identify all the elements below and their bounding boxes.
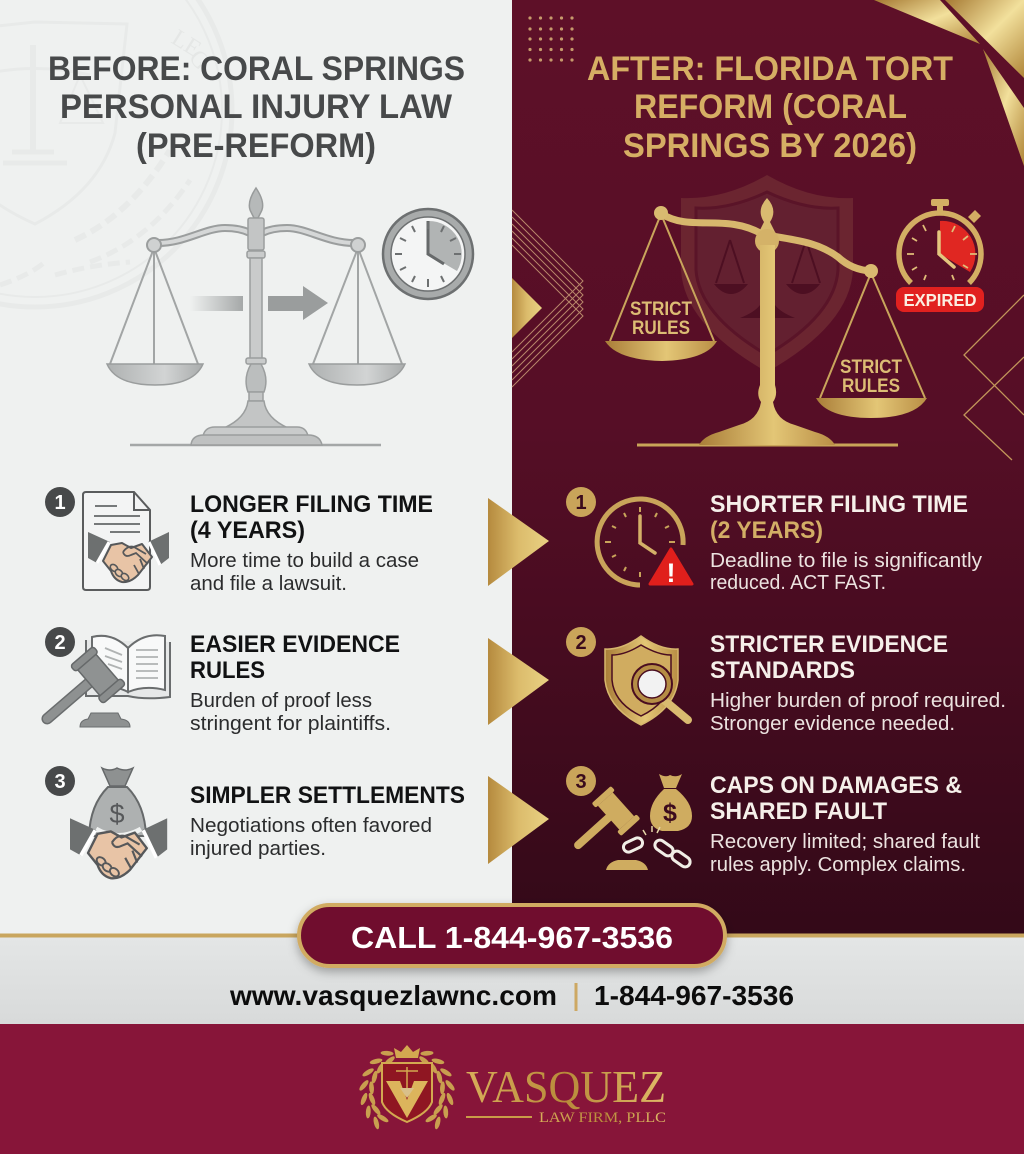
item 2 before: EASIER EVIDENCE <box>190 631 400 658</box>
title: before: PERSONAL INJURY LAW <box>60 88 453 126</box>
item 3 after: SHARED FAULT <box>710 798 887 825</box>
top right gold ribbon <box>874 0 1024 166</box>
icon: gavel bag broken chain <box>560 774 692 870</box>
contact band <box>0 936 1024 1024</box>
item 2 after: Stronger evidence needed. <box>710 713 955 735</box>
logo wordmark: VASQUEZ <box>466 1061 666 1112</box>
title: after: SPRINGS BY 2026) <box>623 127 917 165</box>
text: strict rules right: STRICT <box>840 357 902 378</box>
text: strict rules right <box>840 357 902 397</box>
icon: shield magnifier <box>605 636 688 725</box>
icon: money bag handshake: $ <box>109 799 125 829</box>
item 1 before: LONGER FILING TIME <box>190 491 433 518</box>
item 2 before: RULES <box>190 657 265 684</box>
panel: after background <box>512 0 1024 936</box>
text: strict rules left: RULES <box>632 318 690 339</box>
badge: expired <box>896 287 984 312</box>
item 3 after: CAPS ON DAMAGES & <box>710 772 962 799</box>
title: before: BEFORE: CORAL SPRINGS <box>48 50 465 88</box>
panel: before background <box>0 0 512 936</box>
icon: stopwatch expired <box>896 199 984 312</box>
item 2 before: Burden of proof less <box>190 690 372 712</box>
item 2 before: stringent for plaintiffs. <box>190 713 391 735</box>
icon: grey clock <box>383 209 473 299</box>
item 1 before: (4 YEARS) <box>190 517 305 544</box>
icon: clock warning <box>597 499 692 588</box>
call button: CALL 1-844-967-3536 <box>351 920 673 955</box>
item 3 after <box>560 766 980 876</box>
watermark seal: G <box>183 45 214 75</box>
item 2 after: 2 <box>575 632 587 654</box>
logo wordmark: LAW FIRM, PLLC <box>539 1110 666 1126</box>
item 1 before <box>45 487 433 595</box>
title: before <box>48 50 465 165</box>
call button <box>299 905 725 966</box>
item 1 after: reduced. ACT FAST. <box>710 572 886 594</box>
logo emblem <box>357 1045 457 1131</box>
arrow: grey <box>190 286 328 320</box>
icon: money bag handshake <box>70 768 167 878</box>
title: after: REFORM (CORAL <box>634 88 907 126</box>
icon: document handshake <box>83 492 169 590</box>
item 3 after: rules apply. Complex claims. <box>710 854 966 876</box>
gold side chevron <box>512 278 542 338</box>
watermark seal: LE <box>167 25 205 63</box>
icon: book and gavel <box>27 635 170 741</box>
item 2 before: 2 <box>54 632 66 654</box>
watermark shield <box>681 175 853 372</box>
item 1 after: (2 YEARS) <box>710 517 823 544</box>
watermark seal <box>0 0 232 307</box>
item 2 after: STANDARDS <box>710 657 855 684</box>
contact line <box>229 980 794 1011</box>
item 2 after <box>566 627 1006 735</box>
item 3 before: injured parties. <box>190 838 326 860</box>
footer band <box>0 1024 1024 1154</box>
arrow 1 <box>488 498 549 586</box>
text: strict rules left: STRICT <box>630 299 692 320</box>
tilted gold scales <box>605 198 927 445</box>
arrow 3 <box>488 776 549 864</box>
item 3 before: 3 <box>54 771 66 793</box>
item 3 after: 3 <box>575 771 587 793</box>
title: after: AFTER: FLORIDA TORT <box>587 50 953 88</box>
item 3 before: Negotiations often favored <box>190 815 432 837</box>
item 1 after <box>566 487 982 594</box>
item 1 after: SHORTER FILING TIME <box>710 491 968 518</box>
item 1 before: and file a lawsuit. <box>190 573 347 595</box>
icon: gavel bag broken chain: $ <box>663 799 677 827</box>
title: after <box>587 50 953 165</box>
item 2 after: STRICTER EVIDENCE <box>710 631 948 658</box>
contact line: 1-844-967-3536 <box>594 980 794 1011</box>
dot grid <box>528 16 574 62</box>
item 1 after: Deadline to file is significantly <box>710 550 982 572</box>
item 2 after: Higher burden of proof required. <box>710 690 1006 712</box>
item 3 before: SIMPLER SETTLEMENTS <box>190 782 465 809</box>
icon: stopwatch expired: EXPIRED <box>904 290 976 310</box>
item 3 before <box>45 766 465 878</box>
arrow 2 <box>488 638 549 725</box>
item 1 before: 1 <box>54 492 66 514</box>
text: strict rules right: RULES <box>842 376 900 397</box>
balanced grey scales <box>107 188 405 445</box>
gold divider <box>0 934 1024 938</box>
item 2 before <box>27 627 400 741</box>
contact line: www.vasquezlawnc.com <box>229 980 557 1011</box>
item 3 after: Recovery limited; shared fault <box>710 831 980 853</box>
right diamond lines <box>964 295 1024 460</box>
item 1 after: 1 <box>575 492 587 514</box>
item 1 before: More time to build a case <box>190 550 419 572</box>
chevron line pattern <box>512 210 583 387</box>
icon: clock warning: ! <box>666 558 676 588</box>
text: strict rules left <box>630 299 692 339</box>
title: before: (PRE-REFORM) <box>136 127 376 165</box>
